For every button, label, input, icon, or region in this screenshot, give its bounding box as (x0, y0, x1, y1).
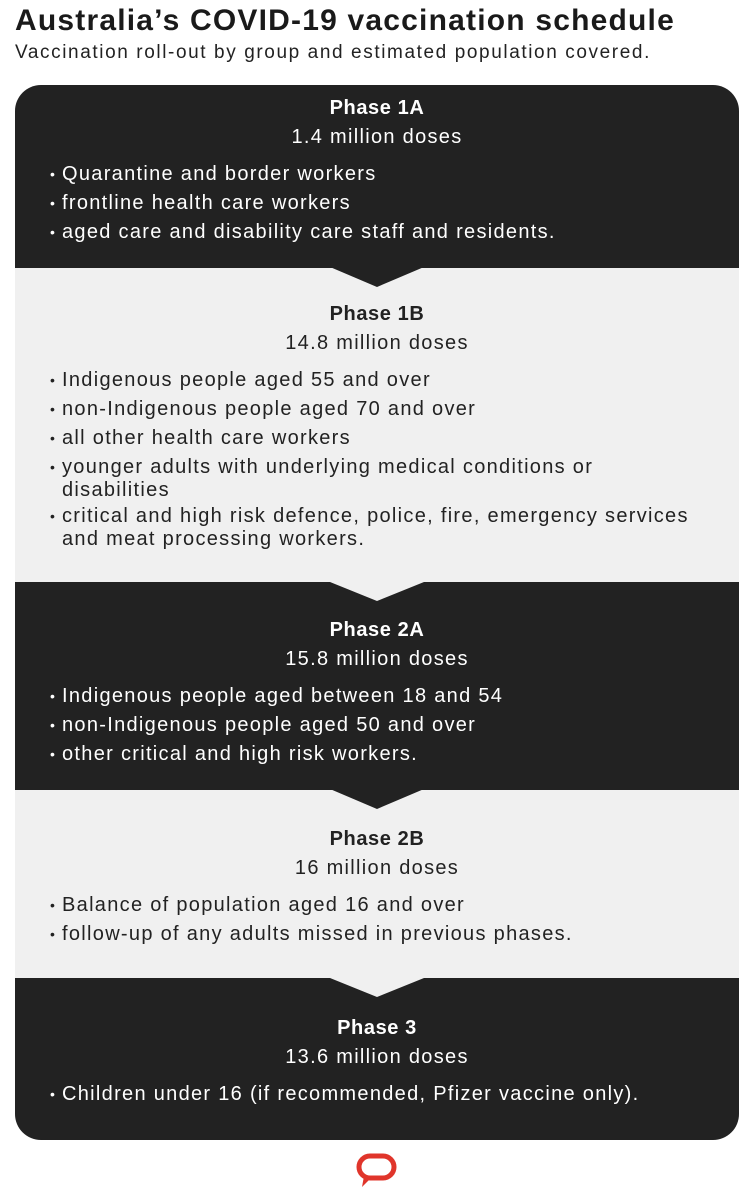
panel: phase 2B: Balance of population aged 16 and over (62, 894, 465, 916)
panel: phase 2B: Phase 2B (330, 828, 424, 850)
panel: phase 1B: disabilities (62, 479, 170, 501)
panel: phase 2A: Phase 2A (330, 619, 424, 641)
panel: phase 1B: non-Indigenous people aged 70 and over (62, 398, 476, 420)
panel: phase 1A: 1.4 million doses (291, 126, 463, 148)
panel: phase 1A (50, 97, 556, 243)
panel: phase 2A: non-Indigenous people aged 50 and over (62, 714, 476, 736)
panel: phase 2B (50, 828, 573, 945)
panel: phase 1B: younger adults with underlying medical conditions or (62, 456, 593, 478)
panel: phase 2B: follow-up of any adults missed in previous phases. (62, 923, 573, 945)
title: Australia’s COVID-19 vaccination schedule (15, 4, 675, 37)
subtitle: Vaccination roll-out by group and estimated population covered. (15, 42, 651, 63)
panel: phase 2A: 15.8 million doses (285, 648, 469, 670)
panel: phase 1B: all other health care workers (62, 427, 351, 449)
panel: phase 1A: frontline health care workers (62, 192, 351, 214)
panel: phase 2A: Indigenous people aged between 18 and 54 (62, 685, 503, 707)
panel: phase 1B: Indigenous people aged 55 and over (62, 369, 431, 391)
panel: phase 2A: other critical and high risk workers. (62, 743, 418, 765)
panel: phase 1B: and meat processing workers. (62, 528, 365, 550)
panel: phase 2A (50, 619, 503, 765)
panel: phase 1B: 14.8 million doses (285, 332, 469, 354)
panel: phase 1B: critical and high risk defence, police, fire, emergency services (62, 505, 689, 527)
panel: phase 3 (50, 1017, 639, 1105)
panel: phase 1B (50, 303, 689, 550)
panel: phase 1A: Quarantine and border workers (62, 163, 377, 185)
panel: phase 2B: 16 million doses (295, 857, 459, 879)
panel: phase 1B: Phase 1B (330, 303, 424, 325)
panel: phase 1A: aged care and disability care staff and residents. (62, 221, 556, 243)
panel: phase 3: 13.6 million doses (285, 1046, 469, 1068)
panel: phase 3: Children under 16 (if recommended, Pfizer vaccine only). (62, 1083, 639, 1105)
panel: phase 1A: Phase 1A (330, 97, 424, 119)
panel: phase 3: Phase 3 (337, 1017, 417, 1039)
icon: logo (356, 1154, 396, 1187)
